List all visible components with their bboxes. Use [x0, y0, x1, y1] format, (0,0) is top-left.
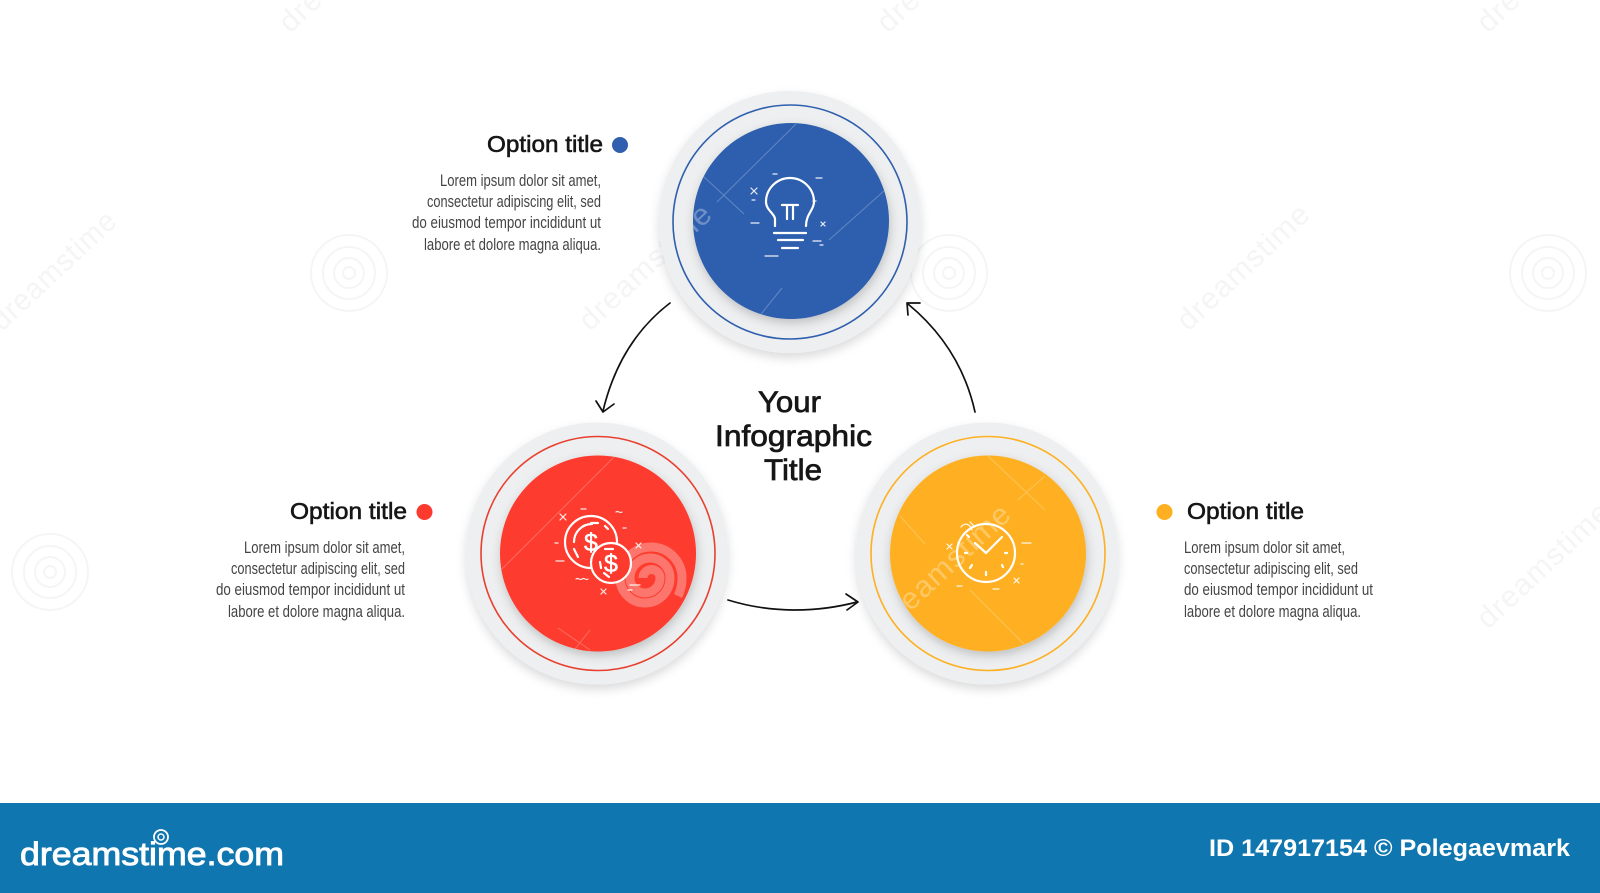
text block: blue option: Lorem ipsum dolor sit amet, [440, 171, 601, 190]
watermark spiral on red circle [620, 547, 682, 603]
center title: Infographic [715, 420, 872, 453]
text block: red option: labore et dolore magna aliqua. [228, 602, 405, 621]
text block: red option: consectetur adipiscing elit, sed [231, 559, 405, 578]
footer credit: ID 147917154 © Polegaevmark [1209, 835, 1571, 862]
icon: light bulb [751, 174, 825, 256]
center title: Title [764, 454, 822, 487]
panel: blue option circle [656, 91, 924, 362]
watermark: background spirals and diagonal text [0, 0, 1600, 635]
arrow: yellow to blue [907, 303, 975, 412]
icon: dollar coins [555, 509, 641, 594]
footer band [0, 803, 1600, 893]
text block: yellow option: Lorem ipsum dolor sit amet, [1184, 538, 1345, 557]
text block: red option [216, 498, 432, 621]
text block: yellow option [1156, 498, 1373, 621]
watermark: background spirals and diagonal text: dreamstime [1170, 197, 1317, 337]
arrow: red to yellow [728, 594, 858, 610]
text block: blue option: Option title [487, 131, 603, 157]
text block: blue option [412, 131, 628, 254]
footer logo: dreamstime.com [20, 836, 284, 872]
icon: clock [947, 522, 1031, 589]
center title: Your [758, 386, 821, 419]
text block: red option: Lorem ipsum dolor sit amet, [244, 538, 405, 557]
panel: blue option circle: dreamstime [572, 197, 719, 337]
text block: blue option: do eiusmod tempor incididunt ut [412, 213, 601, 232]
panel: yellow option circle: dreamstime [871, 497, 1018, 637]
icon: dollar coins: $ [584, 529, 598, 557]
text block: red option: do eiusmod tempor incididunt ut [216, 580, 405, 599]
panel: yellow option circle [856, 422, 1118, 684]
arrow: blue to red [596, 303, 670, 412]
text block: yellow option: labore et dolore magna aliqua. [1184, 602, 1361, 621]
text block: yellow option: Option title [1187, 498, 1304, 524]
text block: yellow option: consectetur adipiscing elit, sed [1184, 559, 1358, 578]
watermark: background spirals and diagonal text: dreamstime [572, 197, 719, 337]
text block: red option: Option title [290, 498, 407, 524]
center title [715, 386, 872, 487]
text block: blue option: consectetur adipiscing elit, sed [427, 192, 601, 211]
text block: blue option: labore et dolore magna aliqua. [424, 235, 601, 254]
icon: dollar coins: $ [604, 550, 618, 578]
panel: red option circle [466, 422, 728, 684]
text block: yellow option: do eiusmod tempor incididunt ut [1184, 580, 1373, 599]
